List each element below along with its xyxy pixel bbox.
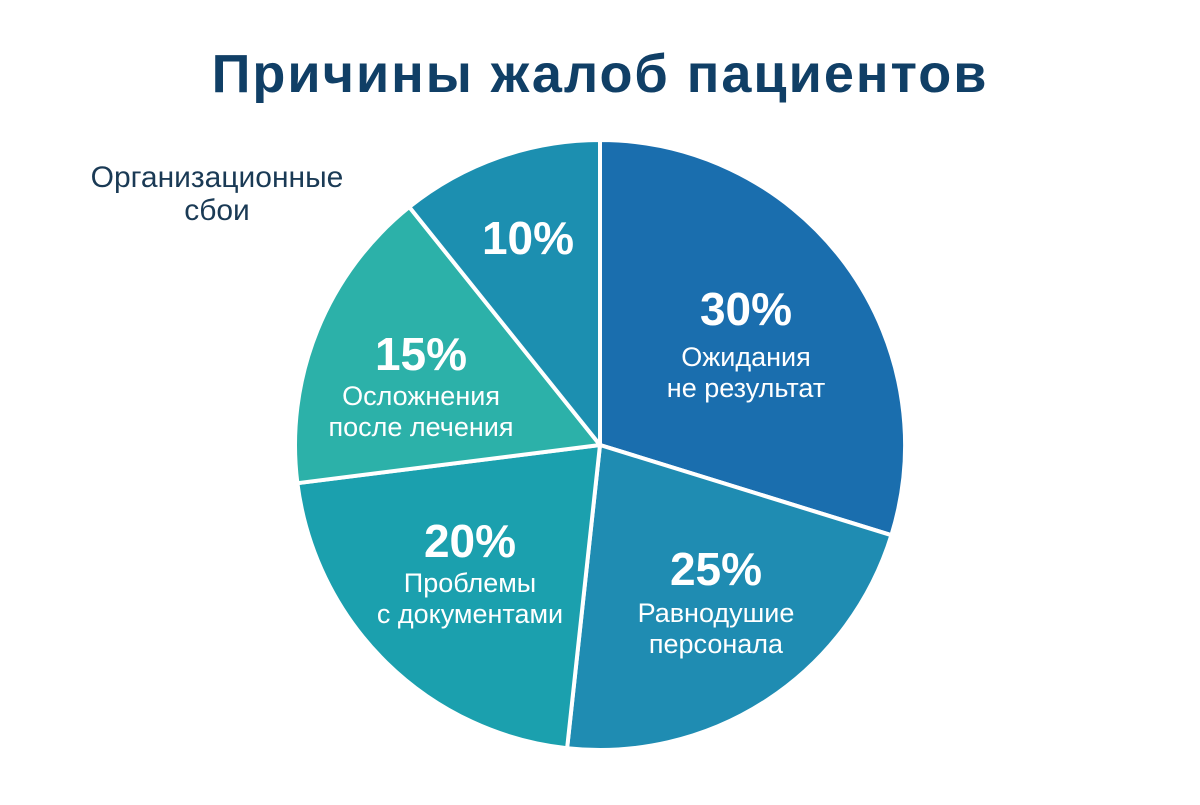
label 30%: 30%: [700, 283, 792, 335]
label 20%: [377, 515, 563, 629]
pie labels: [329, 212, 825, 659]
label 10%: 10%: [482, 212, 574, 264]
label 15%: Осложнения: [342, 381, 500, 411]
label 20%: 20%: [424, 515, 516, 567]
label 15%: 15%: [375, 328, 467, 380]
slice: 15%: [295, 207, 600, 483]
label 25%: Равнодушие: [638, 598, 794, 628]
side label: organizational failures: Организационные: [91, 161, 343, 194]
slice: 20%: [297, 445, 600, 748]
side label: organizational failures: сбои: [184, 194, 250, 227]
label 15%: [329, 328, 513, 442]
slice: 25%: [567, 445, 891, 750]
slice: 10%: [409, 140, 600, 445]
label 15%: после лечения: [329, 412, 513, 442]
label 20%: Проблемы: [404, 568, 536, 598]
pie chart: [295, 140, 905, 750]
side label: organizational failures: [91, 161, 343, 227]
label 30%: не результат: [667, 373, 825, 403]
label 25%: персонала: [649, 629, 784, 659]
slice: 30%: [600, 140, 905, 535]
title: Причины жалоб пациентов: [212, 44, 988, 104]
label 25%: 25%: [670, 543, 762, 595]
label 30%: [667, 283, 825, 403]
label 30%: Ожидания: [681, 342, 811, 372]
label 20%: с документами: [377, 599, 563, 629]
label 25%: [638, 543, 794, 659]
